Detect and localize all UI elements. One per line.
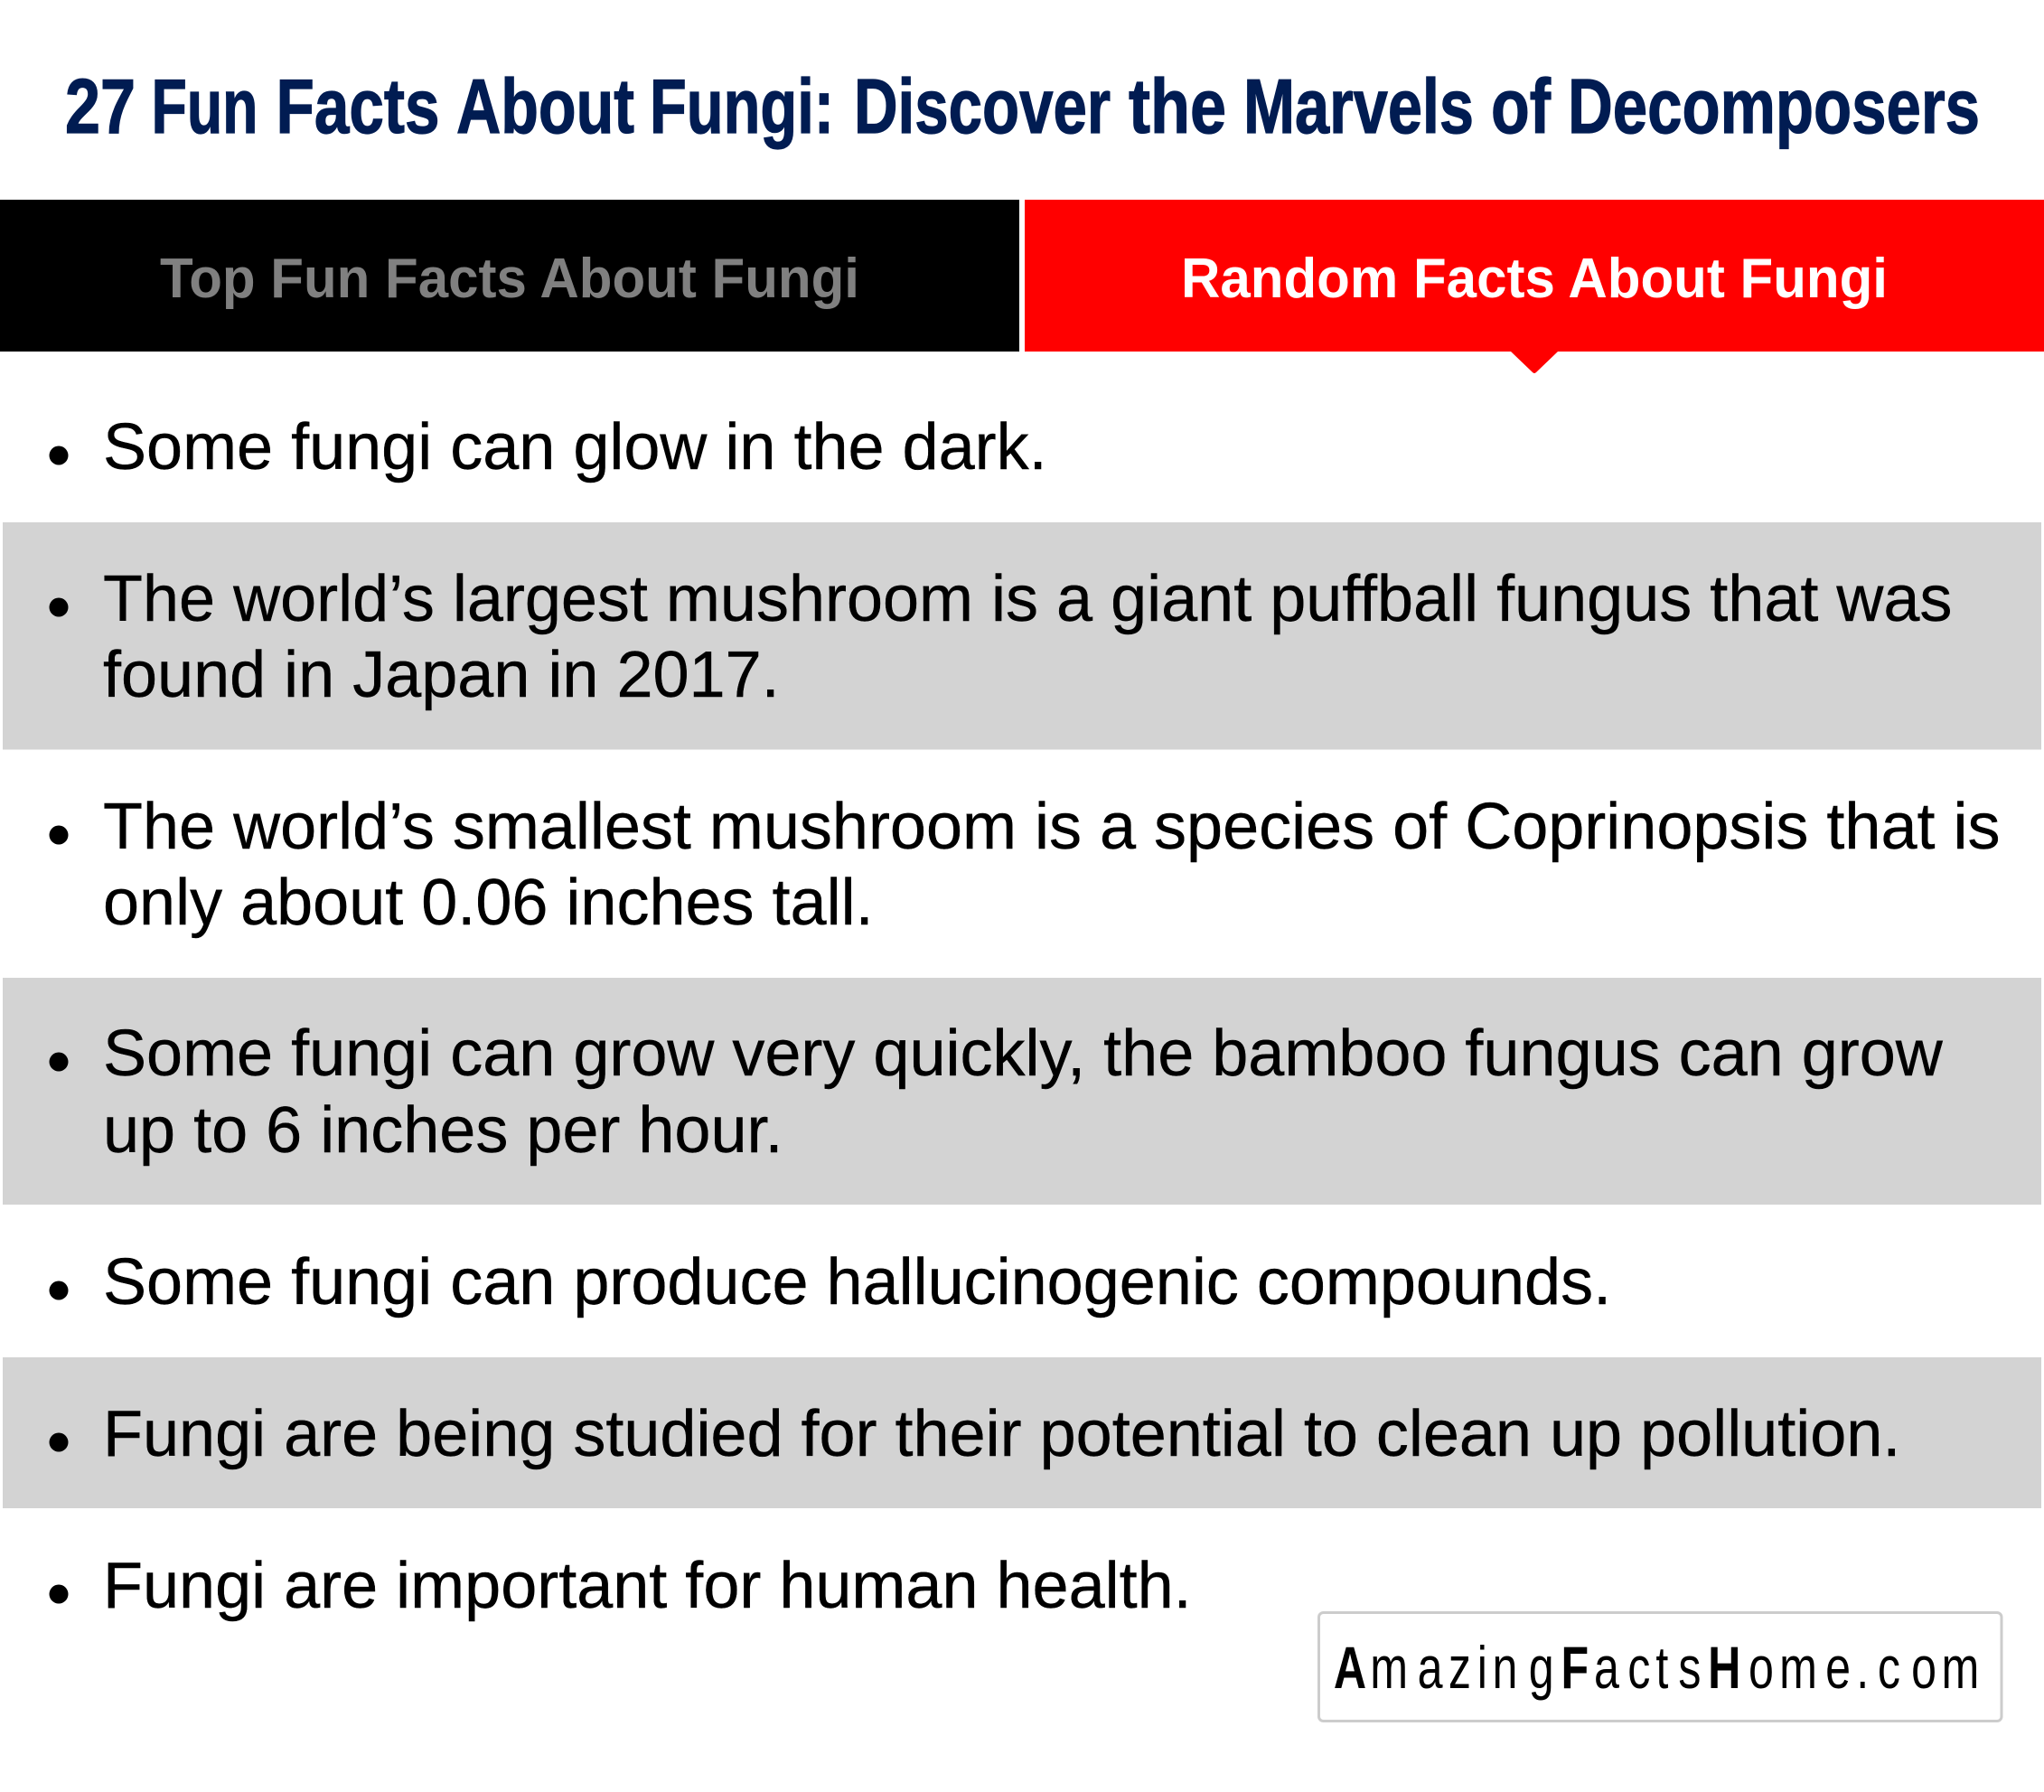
fact 4: up to 6 inches per hour. [103, 1094, 783, 1167]
title [65, 64, 1980, 150]
tab: top fun facts: Top Fun Facts About Fungi [160, 248, 859, 310]
title: About [456, 64, 634, 150]
fact 7: Fungi are important for human health. [103, 1550, 1192, 1622]
tab: top fun facts [0, 200, 1019, 352]
watermark: AmazingFactsHome.com [1319, 1612, 2002, 1721]
title: Facts [277, 64, 439, 150]
fact 1: Some fungi can glow in the dark. [103, 411, 1047, 483]
fact 6 [3, 1357, 2041, 1508]
title: Fun [152, 64, 258, 150]
fact 2 [3, 522, 2041, 750]
title: 27 [65, 64, 136, 150]
fact 6: Fungi are being studied for their potential to clean up pollution. [103, 1398, 1900, 1470]
fact 3 [49, 791, 2001, 939]
fact 3: only about 0.06 inches tall. [103, 867, 874, 939]
tab: random facts (active): Random Facts About Fungi [1181, 248, 1888, 310]
fact 5: Some fungi can produce hallucinogenic compounds. [103, 1246, 1611, 1318]
watermark: AmazingFactsHome.com: AmazingFactsHome.com [1334, 1635, 1979, 1702]
fact 4: Some fungi can grow very quickly, the bamboo fungus can grow [103, 1018, 1944, 1090]
fact 3: The world’s smallest mushroom is a species of Coprinopsis that is [103, 791, 2001, 863]
title: Discover [854, 64, 1111, 150]
fact 2: The world’s largest mushroom is a giant puffball fungus that was [103, 563, 1952, 635]
title: the [1129, 64, 1226, 150]
fact 2: found in Japan in 2017. [103, 639, 780, 711]
fact 4 [3, 978, 2041, 1205]
title: Marvels [1243, 64, 1474, 150]
tab: random facts (active) [1025, 200, 2044, 373]
title: of [1491, 64, 1552, 150]
title: Fungi: [650, 64, 834, 150]
